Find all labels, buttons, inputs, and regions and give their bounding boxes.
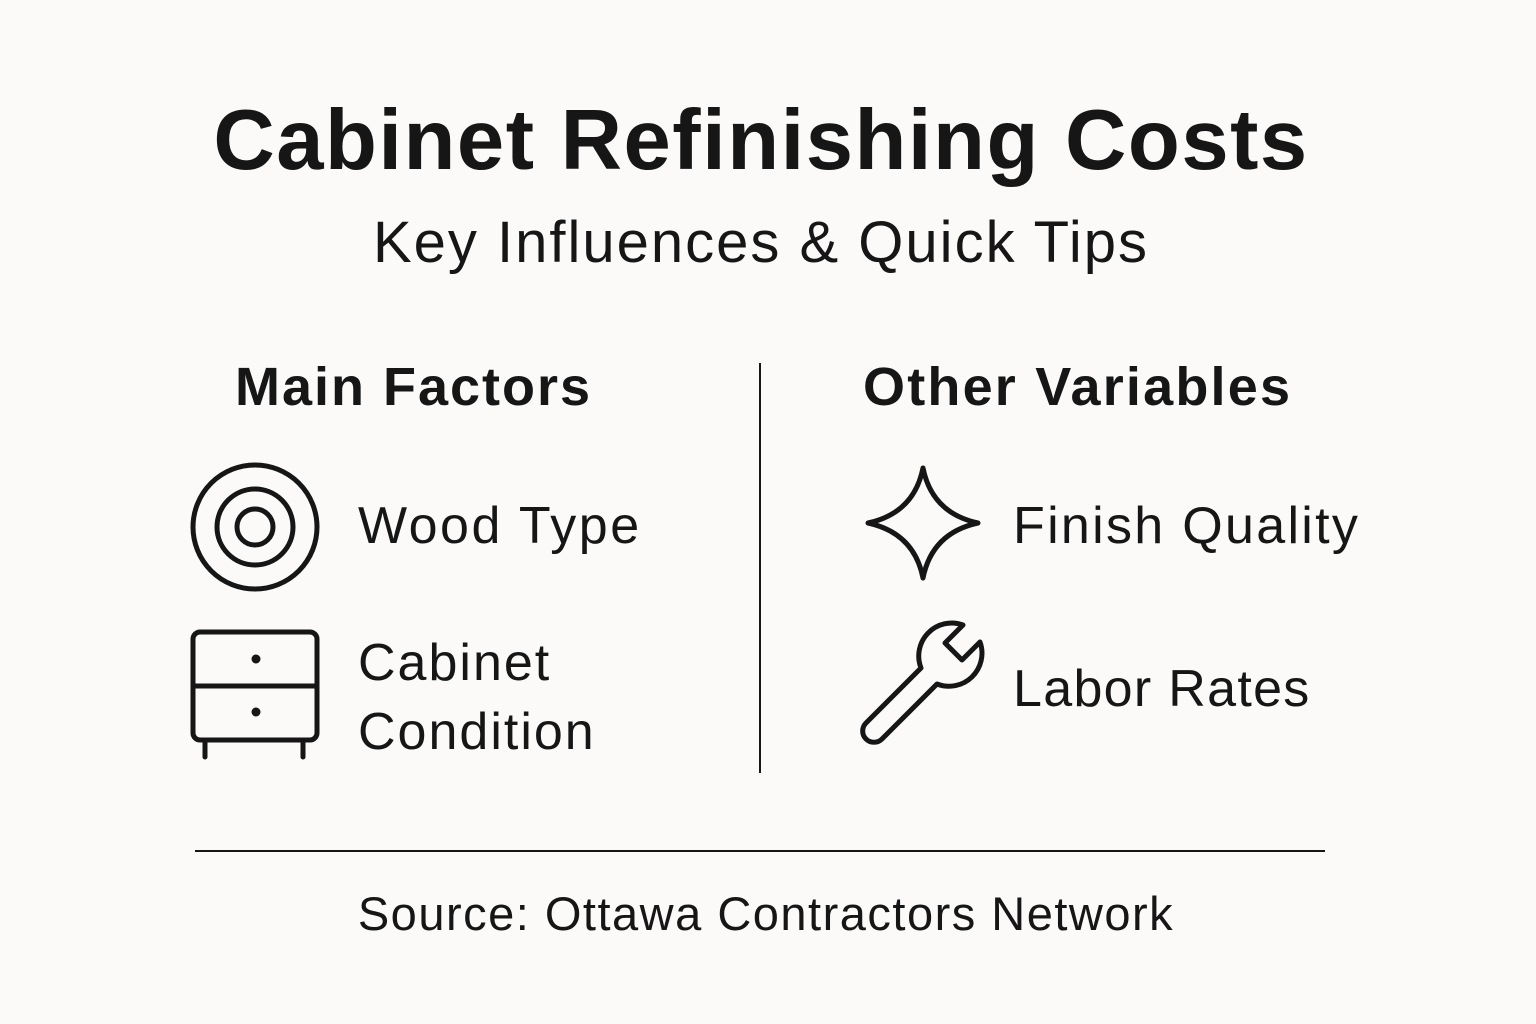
label: cabinet condition: Cabinet (358, 634, 551, 692)
source text: Source: Ottawa Contractors Network (358, 887, 1174, 940)
subtitle: Key Influences & Quick Tips (373, 210, 1149, 275)
title: Cabinet Refinishing Costs (213, 93, 1309, 188)
panel: other variables (860, 357, 1360, 745)
heading: main factors: Main Factors (235, 357, 592, 417)
divider horizontal (195, 850, 1325, 852)
label: wood type: Wood Type (358, 497, 642, 555)
label: cabinet condition: Condition (358, 703, 596, 761)
label: cabinet condition (358, 634, 596, 761)
icon: sparkle (866, 466, 980, 580)
label: finish quality: Finish Quality (1013, 497, 1360, 555)
panel: main factors (190, 357, 642, 761)
icon: cabinet (190, 630, 320, 760)
icon: wrench (860, 620, 984, 745)
label: labor rates: Labor Rates (1013, 660, 1311, 718)
icon: wood rings (190, 462, 320, 592)
heading: other variables: Other Variables (863, 357, 1292, 417)
divider vertical (759, 363, 761, 773)
